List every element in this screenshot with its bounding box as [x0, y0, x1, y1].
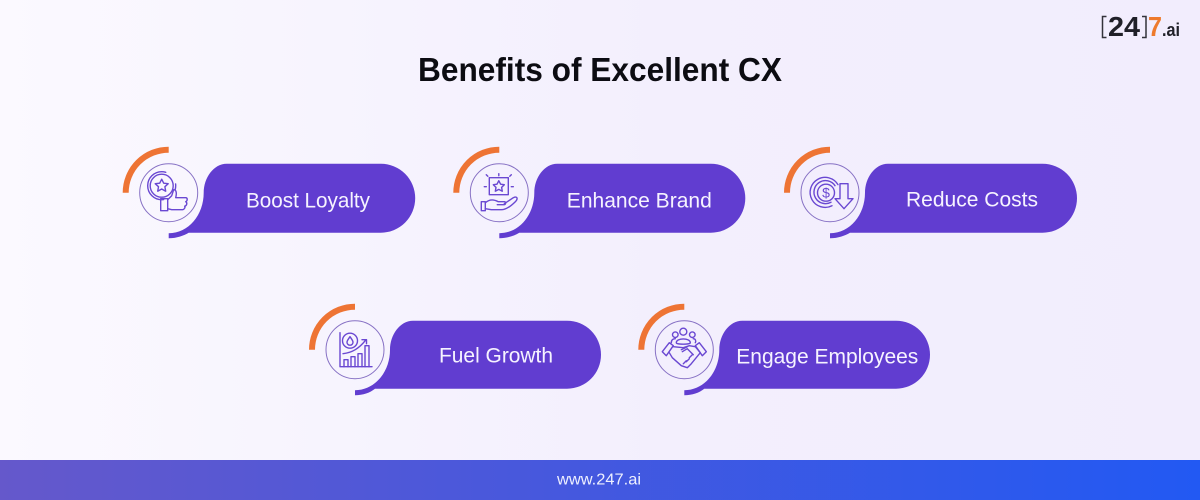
label: Boost Loyalty: [246, 190, 370, 213]
icon: star badge and thumbs up: [148, 172, 187, 211]
card: Boost Loyalty: [126, 150, 415, 238]
logo: 24: [1108, 11, 1140, 42]
label: Enhance Brand: [567, 190, 712, 213]
card: Fuel Growth: [312, 307, 601, 395]
purple pill: [169, 164, 415, 238]
orange arc: [787, 150, 830, 193]
icon: growth chart with fuel drop: [340, 333, 372, 367]
orange arc: [641, 307, 684, 350]
purple pill: [830, 164, 1077, 238]
footer bar: [0, 460, 1200, 500]
footer url: www.247.ai: [556, 472, 641, 488]
icon ring: [655, 321, 713, 379]
orange arc: [312, 307, 355, 350]
card: Reduce Costs: [787, 150, 1077, 238]
title: Benefits of Excellent CX: [418, 51, 782, 88]
icon: team and handshake: [662, 328, 706, 368]
icon: dollar coin with down arrow: $: [822, 185, 830, 201]
logo: .ai: [1162, 20, 1180, 40]
icon: dollar coin with down arrow: [810, 177, 853, 209]
icon: hand holding star: [481, 174, 517, 211]
orange arc: [456, 150, 499, 193]
label: Engage Employees: [736, 346, 918, 369]
purple pill: [499, 164, 745, 238]
logo: 7: [1148, 11, 1162, 42]
label: Reduce Costs: [906, 189, 1038, 212]
card: Engage Employees: [641, 307, 930, 395]
icon ring: [801, 164, 859, 222]
icon ring: [470, 164, 528, 222]
purple pill: [355, 321, 601, 395]
label: Fuel Growth: [439, 345, 553, 368]
purple pill: [684, 321, 930, 395]
card: Enhance Brand: [456, 150, 745, 238]
orange arc: [126, 150, 169, 193]
icon ring: [326, 321, 384, 379]
logo: [1102, 11, 1180, 42]
icon ring: [140, 164, 198, 222]
